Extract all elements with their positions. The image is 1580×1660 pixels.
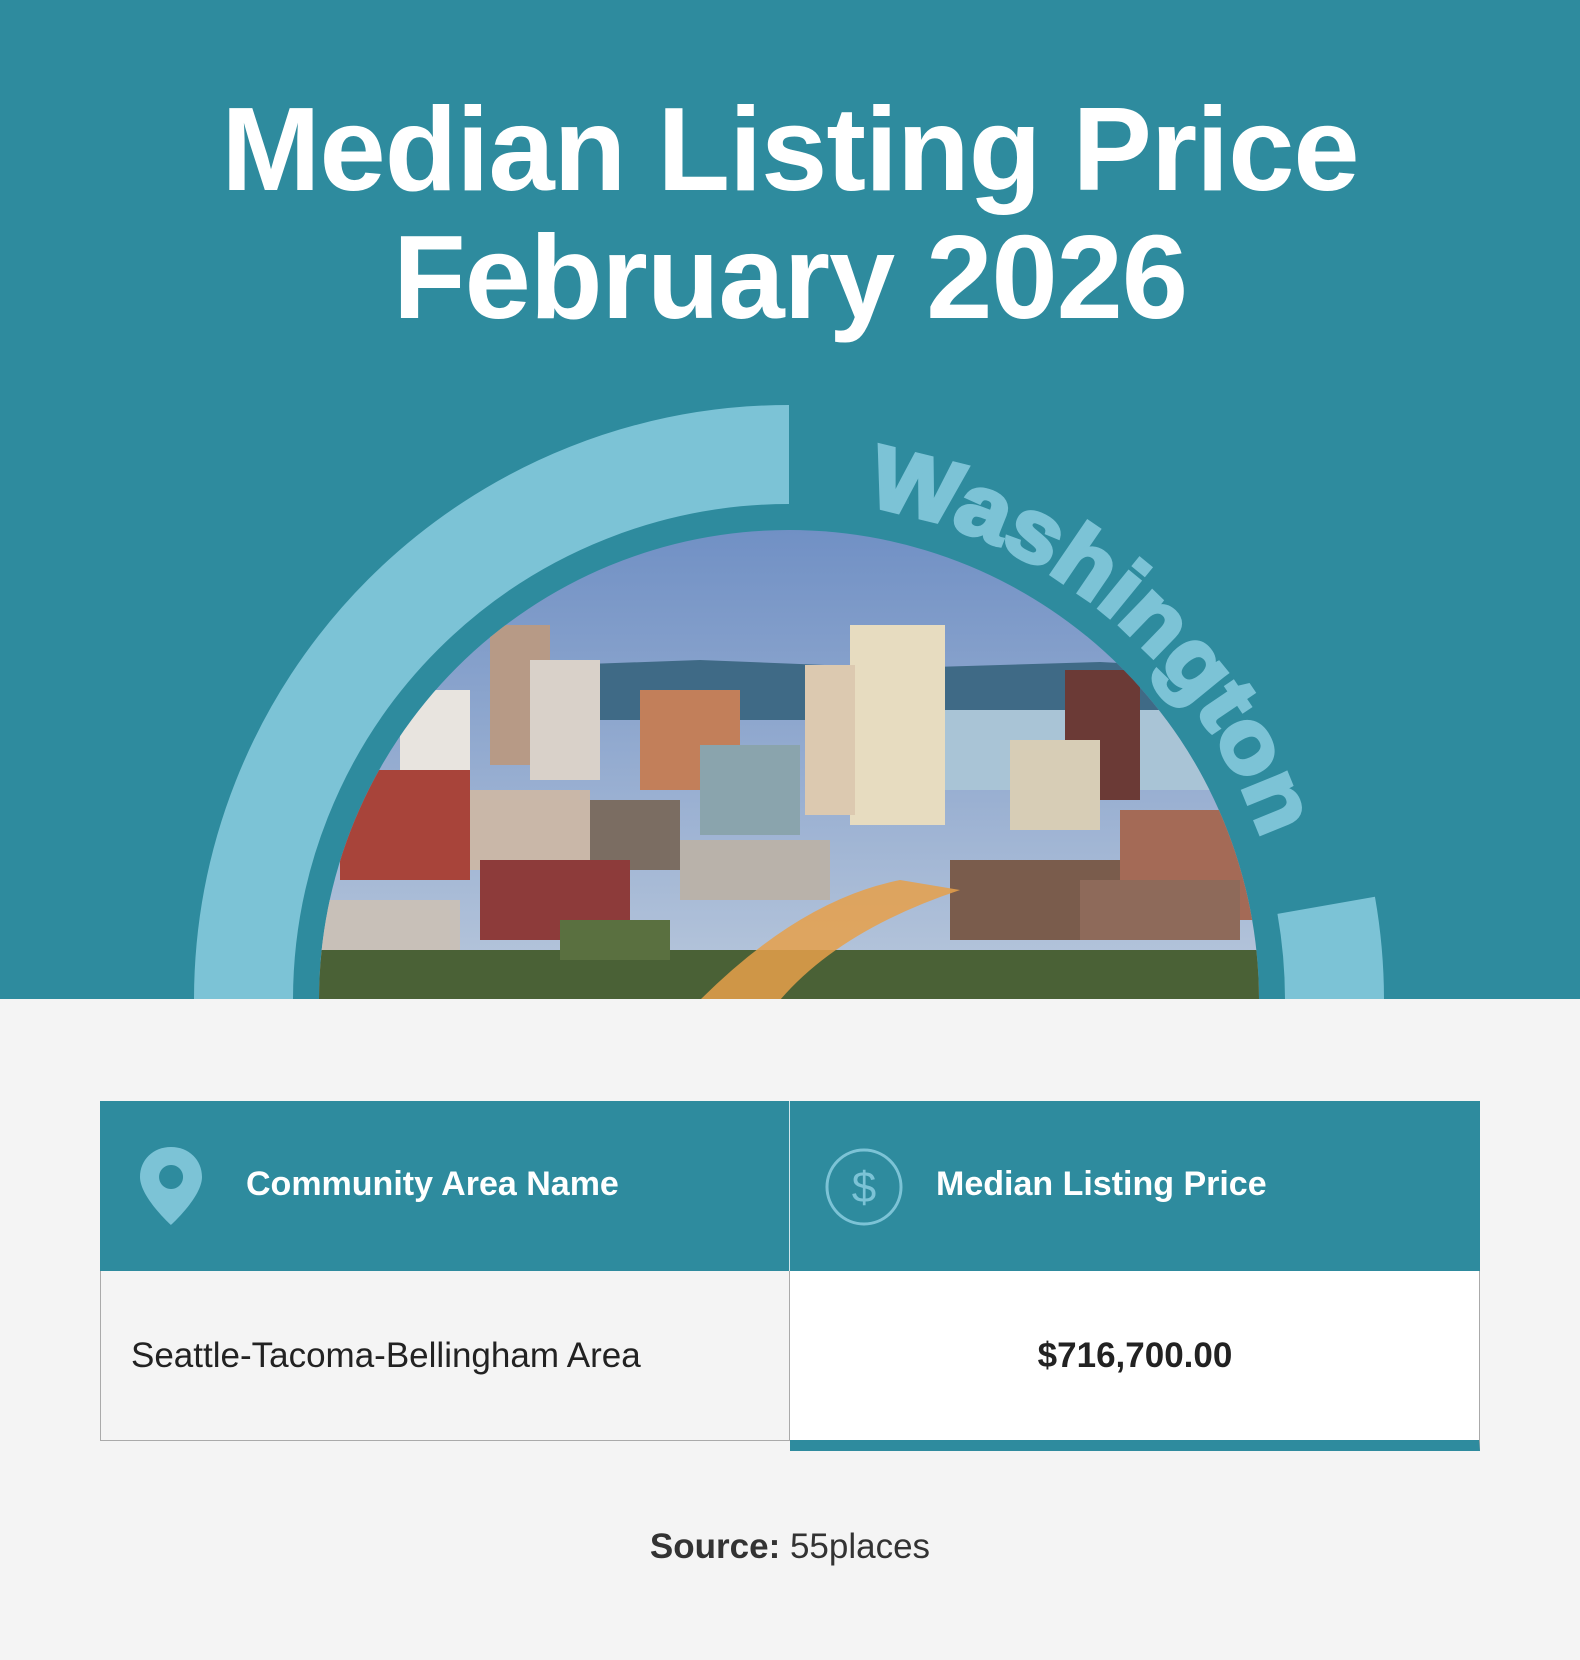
- source: Source: 55places: [650, 1527, 930, 1566]
- arc: [244, 454, 1334, 1000]
- icon: dollar: $: [852, 1163, 876, 1212]
- row: area name: [100, 1271, 790, 1441]
- title: Median Listing Price: [221, 83, 1359, 216]
- row: price: [790, 1271, 1480, 1451]
- row: area name: Seattle-Tacoma-Bellingham Area: [131, 1336, 641, 1375]
- header: price: Median Listing Price: [936, 1165, 1267, 1203]
- header band: [0, 0, 1580, 999]
- title: February 2026: [393, 211, 1187, 344]
- icon: dollar: [826, 1148, 902, 1226]
- table: [100, 1101, 1480, 1451]
- hero graphic: arc, city image, state name: [194, 405, 1384, 999]
- row: price: $716,700.00: [1038, 1336, 1232, 1375]
- title: [221, 83, 1359, 344]
- icon: location pin: [140, 1147, 202, 1225]
- header: community: Community Area Name: [246, 1165, 619, 1203]
- city image: [300, 520, 1280, 1000]
- header row: [100, 1101, 1480, 1271]
- state name: Washington: [878, 442, 1302, 836]
